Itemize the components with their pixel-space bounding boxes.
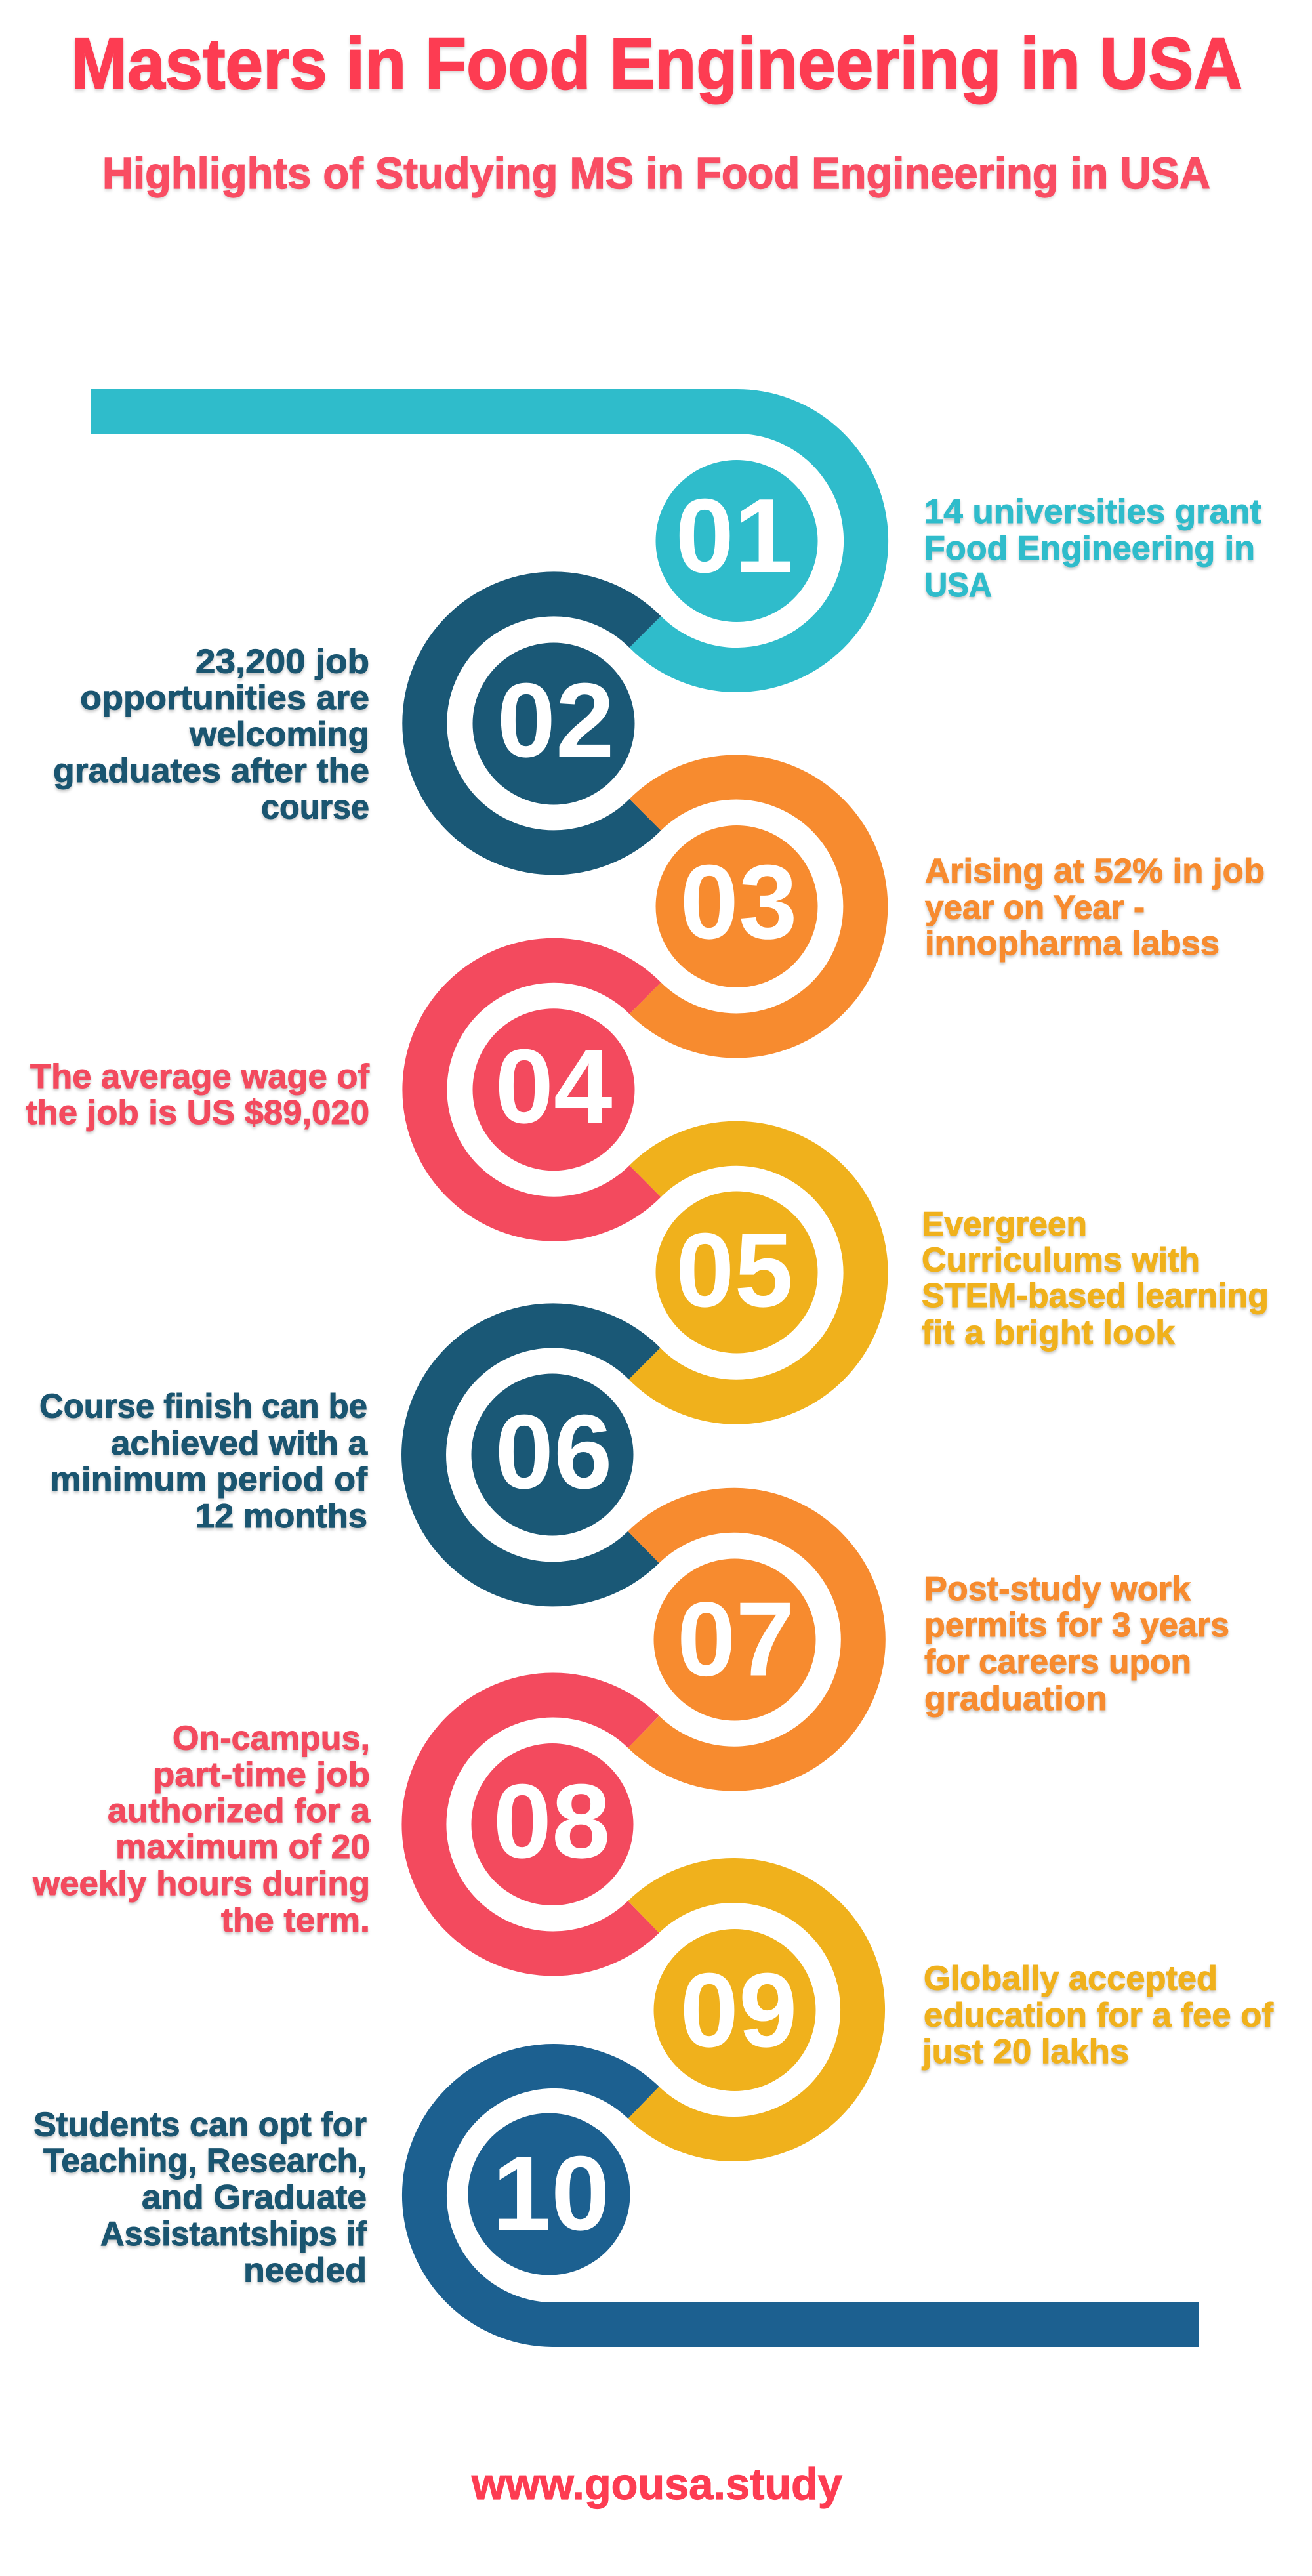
step 03: [646, 777, 865, 1035]
disc: [468, 2113, 630, 2275]
step 09: [644, 1880, 863, 2139]
step 05: [644, 1144, 866, 1402]
text: step 10: and Graduate: [142, 2178, 367, 2216]
disc: [656, 825, 817, 987]
text: step 04: The average wage of: [30, 1058, 370, 1096]
text: step 07: [924, 1570, 1229, 1718]
disc: [471, 1374, 634, 1535]
ring: [424, 1695, 644, 1953]
text: step 07: graduation: [924, 1680, 1107, 1718]
text: step 10: Assistantships if: [100, 2215, 367, 2253]
number: 10: [492, 2134, 610, 2253]
text: step 02: course: [261, 789, 369, 827]
step 01: [91, 411, 866, 670]
disc: [472, 1008, 635, 1171]
text: step 03: year on Year -: [925, 888, 1145, 926]
text: step 01: Food Engineering in: [924, 530, 1255, 568]
number: 04: [495, 1028, 613, 1146]
text: step 09: Globally accepted: [924, 1959, 1218, 1997]
text: step 06: Course finish can be: [39, 1387, 367, 1425]
text: step 09: education for a fee of: [924, 1996, 1274, 2034]
text: step 09: [922, 1959, 1274, 2071]
ring: [644, 1510, 863, 1769]
text: step 06: [39, 1387, 368, 1535]
step 04: [424, 961, 646, 1219]
step 07: [644, 1510, 863, 1769]
ring: [424, 594, 646, 852]
number: 06: [495, 1393, 613, 1511]
text: step 07: Post-study work: [924, 1570, 1191, 1608]
text: step 05: Evergreen: [922, 1205, 1087, 1243]
text: step 08: [32, 1719, 371, 1940]
text: step 08: maximum of 20: [115, 1828, 370, 1866]
text: step 10: [33, 2106, 367, 2290]
text: step 02: opportunities are: [80, 679, 369, 717]
number: 08: [493, 1762, 611, 1880]
text: step 08: part-time job: [153, 1756, 370, 1794]
text: step 08: the term.: [221, 1901, 370, 1940]
number: 09: [680, 1951, 798, 2069]
text: step 06: 12 months: [195, 1497, 367, 1535]
text: step 05: fit a bright look: [922, 1314, 1175, 1352]
disc: [471, 1743, 634, 1905]
disc: [653, 1559, 816, 1720]
text: step 08: weekly hours during: [32, 1865, 370, 1903]
text: step 05: Curriculums with: [922, 1241, 1200, 1279]
text: step 05: STEM-based learning: [922, 1277, 1269, 1315]
text: step 04: [26, 1058, 370, 1132]
disc: [656, 460, 817, 622]
text: step 01: 14 universities grant: [924, 493, 1261, 531]
text: step 06: minimum period of: [50, 1461, 368, 1499]
text: step 10: Teaching, Research,: [43, 2142, 367, 2180]
text: step 06: achieved with a: [111, 1424, 368, 1463]
ring: [646, 777, 865, 1035]
text: step 10: Students can opt for: [33, 2106, 367, 2144]
ring with top bar: [91, 411, 866, 670]
text: step 10: needed: [243, 2252, 367, 2290]
ring: [424, 961, 646, 1219]
step 06: [424, 1325, 644, 1584]
disc: [656, 1192, 817, 1353]
number: 07: [677, 1580, 794, 1698]
ring: [644, 1144, 866, 1402]
text: step 01: USA: [924, 566, 992, 604]
ring: [424, 1325, 644, 1584]
text: step 05: [922, 1205, 1269, 1352]
text: step 03: innopharma labss: [925, 924, 1220, 963]
text: step 04: the job is US $89,020: [26, 1094, 369, 1132]
title: Masters in Food Engineering in USA: [71, 24, 1242, 104]
step 02: [424, 594, 646, 852]
text: step 02: 23,200 job: [195, 643, 369, 681]
number: 03: [680, 843, 798, 961]
step 10: [424, 2066, 1199, 2325]
step 08: [424, 1695, 644, 1953]
subtitle: Highlights of Studying MS in Food Engineering in USA: [102, 149, 1210, 198]
text: step 02: graduates after the: [53, 752, 369, 790]
text: step 09: just 20 lakhs: [922, 2033, 1129, 2071]
text: step 03: [925, 852, 1265, 963]
number: 02: [497, 661, 615, 779]
text: step 08: On-campus,: [173, 1719, 370, 1757]
disc: [653, 1929, 816, 2091]
number: 05: [676, 1211, 793, 1329]
disc: [472, 643, 635, 804]
number: 01: [675, 477, 793, 595]
footer url: www.gousa.study: [471, 2459, 842, 2509]
text: step 02: [53, 643, 369, 827]
text: step 02: welcoming: [189, 715, 369, 753]
ring: [644, 1880, 863, 2139]
text: step 07: for careers upon: [924, 1643, 1191, 1681]
text: step 07: permits for 3 years: [924, 1606, 1229, 1644]
text: step 03: Arising at 52% in job: [925, 852, 1265, 890]
ring with bottom bar: [424, 2066, 1199, 2325]
text: step 01: [924, 493, 1261, 604]
text: step 08: authorized for a: [108, 1792, 371, 1830]
